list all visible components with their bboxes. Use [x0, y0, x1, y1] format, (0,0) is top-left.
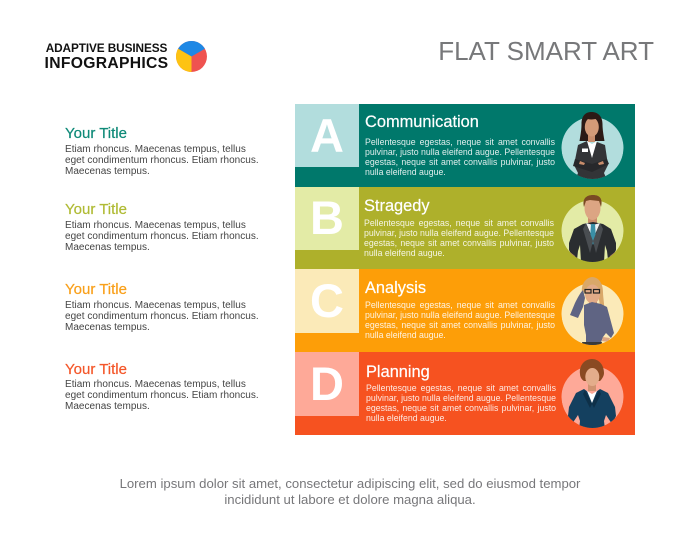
paragraph: Pellentesque egestas, neque sit amet convallis: [365, 137, 555, 147]
paragraph: [366, 383, 556, 423]
heading: Your Title: [65, 280, 127, 298]
portrait: man in suit: [562, 195, 624, 262]
body: Maecenas tempus.: [65, 166, 150, 177]
letter A: [295, 104, 359, 167]
body: eget condimentum rhoncus. Etiam rhoncus.: [65, 390, 259, 401]
paragraph: [365, 300, 555, 340]
body: eget condimentum rhoncus. Etiam rhoncus.: [65, 231, 259, 242]
title: FLAT SMART ART: [438, 36, 654, 66]
paragraph: pulvinar, justo nulla eleifend augue. Pellentesque: [366, 393, 556, 403]
heading: Your Title: [65, 200, 127, 218]
letter A: A: [310, 109, 344, 162]
panel: B strategy: [295, 187, 635, 269]
footer text: Lorem ipsum dolor sit amet, consectetur adipiscing elit, sed do eiusmod tempor: [120, 476, 580, 491]
portraits: [562, 112, 624, 428]
paragraph: [365, 137, 555, 177]
logo: [45, 41, 207, 72]
letter D: D: [310, 357, 344, 410]
logo text: ADAPTIVE BUSINESS: [46, 41, 167, 55]
portrait: woman with crossed arms: [562, 112, 624, 180]
paragraph: nulla eleifend augue.: [364, 248, 445, 258]
body: eget condimentum rhoncus. Etiam rhoncus.: [65, 155, 259, 166]
paragraph: nulla eleifend augue.: [365, 167, 446, 177]
portrait: woman with glasses: [562, 277, 624, 346]
paragraph: egestas, neque sit amet convallis pulvinar, justo: [365, 157, 555, 167]
heading: Your Title: [65, 124, 127, 142]
body: [65, 300, 259, 333]
left text block 3: [65, 280, 259, 333]
body: Maecenas tempus.: [65, 242, 150, 253]
paragraph: egestas, neque sit amet convallis pulvinar, justo: [364, 238, 554, 248]
letter C: [295, 269, 359, 333]
paragraph: Pellentesque egestas, neque sit amet convallis: [366, 383, 556, 393]
paragraph: nulla eleifend augue.: [365, 330, 446, 340]
body: Maecenas tempus.: [65, 401, 150, 412]
icon: logo pie: [176, 41, 207, 72]
footer text: [120, 476, 580, 507]
logo text: INFOGRAPHICS: [45, 55, 168, 72]
paragraph: [364, 218, 554, 258]
portrait: woman in navy jacket: [562, 359, 624, 430]
body: eget condimentum rhoncus. Etiam rhoncus.: [65, 311, 259, 322]
paragraph: egestas, neque sit amet convallis pulvinar, justo: [366, 403, 556, 413]
body: [65, 144, 259, 177]
heading: Stragedy: [364, 197, 430, 215]
heading: Planning: [366, 363, 430, 381]
paragraph: Pellentesque egestas, neque sit amet convallis: [364, 218, 554, 228]
left text block 1: [65, 124, 259, 177]
body: Etiam rhoncus. Maecenas tempus, tellus: [65, 300, 246, 310]
paragraph: egestas, neque sit amet convallis pulvinar, justo: [365, 320, 555, 330]
letter B: B: [310, 191, 344, 244]
letter C: C: [310, 274, 344, 327]
paragraph: pulvinar, justo nulla eleifend augue. Pellentesque: [364, 228, 554, 238]
paragraph: pulvinar, justo nulla eleifend augue. Pellentesque: [365, 147, 555, 157]
panel: A communication: [295, 104, 635, 187]
heading: Communication: [365, 113, 479, 131]
body: Etiam rhoncus. Maecenas tempus, tellus: [65, 220, 246, 230]
letter D: [295, 352, 359, 416]
paragraph: Pellentesque egestas, neque sit amet convallis: [365, 300, 555, 310]
paragraph: pulvinar, justo nulla eleifend augue. Pellentesque: [365, 310, 555, 320]
body: Maecenas tempus.: [65, 322, 150, 333]
letter B: [295, 187, 359, 250]
footer text: incididunt ut labore et dolore magna aliqua.: [224, 492, 476, 507]
left text block 2: [65, 200, 259, 253]
left text block 4: [65, 360, 259, 412]
logo text: [45, 41, 168, 72]
heading: Analysis: [365, 279, 426, 297]
body: [65, 378, 259, 412]
body: Etiam rhoncus. Maecenas tempus, tellus: [65, 378, 246, 390]
panel: D planning: [295, 352, 635, 435]
heading: Your Title: [65, 360, 127, 378]
body: [65, 220, 259, 253]
paragraph: nulla eleifend augue.: [366, 413, 447, 423]
body: Etiam rhoncus. Maecenas tempus, tellus: [65, 144, 246, 154]
panel: C analysis: [295, 269, 635, 352]
